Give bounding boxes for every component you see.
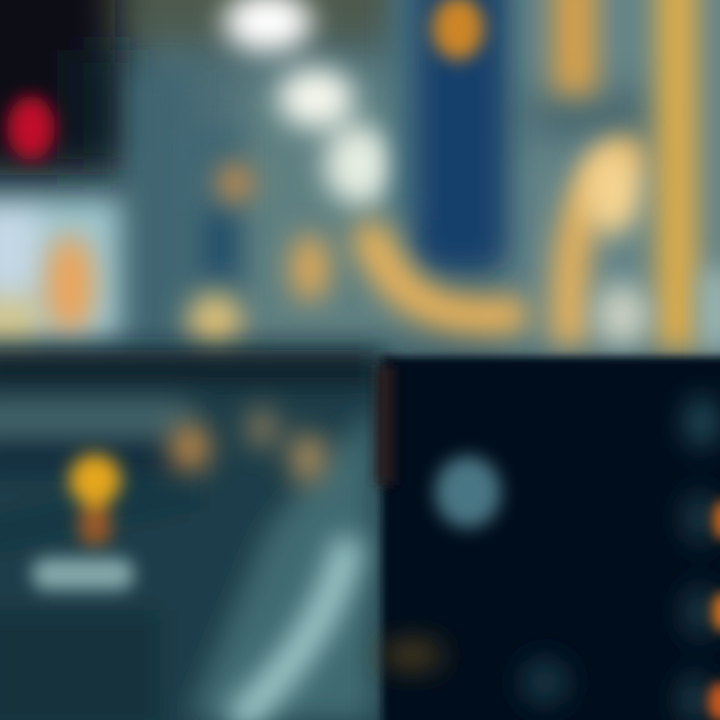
light streak on floor	[235, 540, 350, 720]
yellow curved sign	[372, 240, 510, 316]
lower-left floor	[0, 350, 390, 720]
blue panel	[395, 0, 505, 270]
dark panel	[376, 357, 720, 720]
yellow columns	[553, 0, 697, 350]
panel circle	[435, 456, 501, 528]
orange floor lights	[170, 408, 326, 484]
light bar on floor	[32, 558, 134, 590]
ceiling lights	[224, 0, 396, 205]
dark upper-left corner	[0, 0, 130, 175]
orange circle on panel	[432, 0, 484, 60]
right edge teal glows	[679, 396, 720, 720]
small amber lamps	[187, 163, 330, 348]
poster at left	[0, 200, 120, 345]
right edge orange lights	[708, 500, 720, 720]
panel small glow	[521, 658, 569, 706]
upper background wall	[0, 0, 720, 360]
icon: red light	[7, 96, 55, 160]
panel amber text glow	[380, 639, 444, 671]
yellow floor lamp	[69, 454, 121, 547]
pillar	[130, 70, 240, 350]
yellow arch	[569, 145, 720, 350]
